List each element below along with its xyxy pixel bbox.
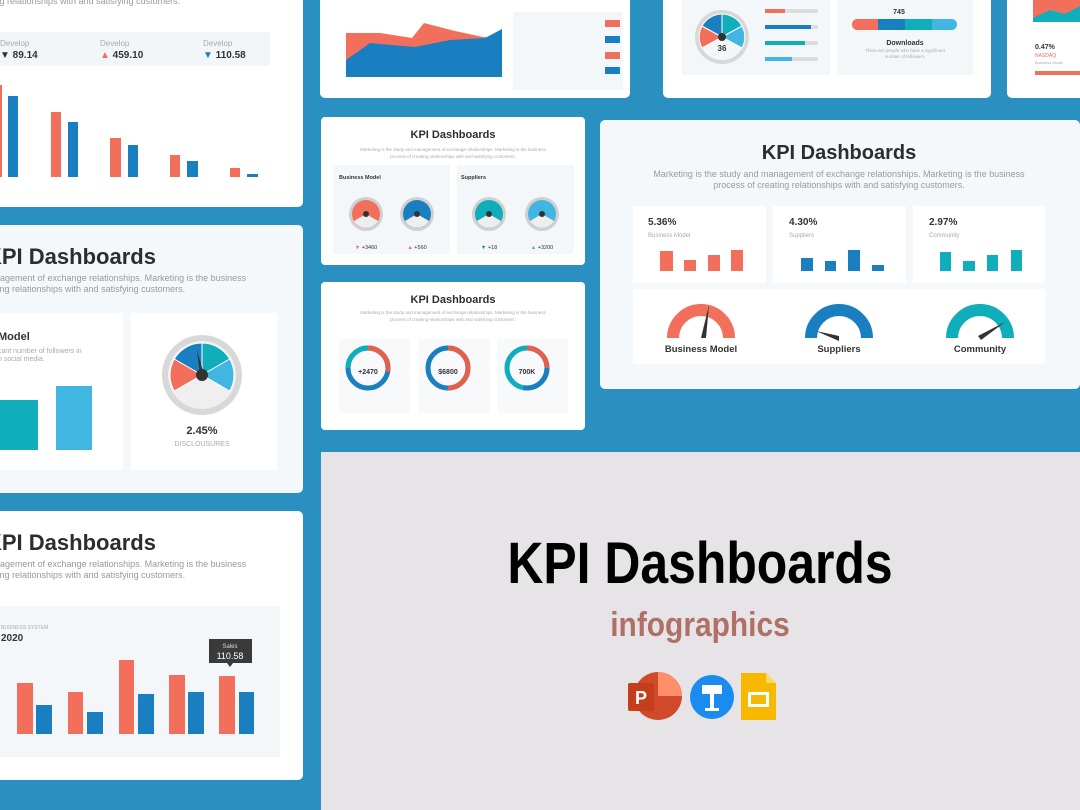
panel: main KPI slide: Community: [929, 233, 959, 239]
panel: main KPI slide: [600, 120, 1080, 389]
panel: card E gauges: Suppliers: [461, 175, 486, 181]
panel: card E gauges: [321, 117, 585, 265]
panel: card G NPS and downloads: Downloads: [886, 40, 924, 47]
panel: card G NPS and downloads: [663, 0, 991, 98]
chart: big gauge: [162, 335, 242, 415]
callout: sales tooltip: Sales: [222, 644, 238, 650]
panel: main KPI slide: 4.30%: [789, 217, 817, 228]
text block: main slide subtitle: [653, 169, 1025, 190]
panel: card A bar chart: Develop: [203, 39, 233, 48]
panel: card H: Business Model: [1035, 60, 1063, 65]
panel: card A bar chart: ▼ 110.58: [203, 50, 246, 61]
callout: sales tooltip: 110.58: [217, 651, 243, 661]
panel: card F donuts: Marketing is the study and management of exchange relationships. Marketing is the business: [360, 310, 547, 315]
panel: card E gauges: process of creating relationships with and satisfying customers.: [390, 154, 516, 159]
panel: main KPI slide: Community: [954, 344, 1007, 355]
icon: Google Slides: [741, 673, 776, 720]
panel: card E gauges: Business Model: [339, 175, 381, 181]
panel: card E gauges: ▼ +18: [481, 245, 497, 251]
panel: card C sales bar chart: BUSINESS SYSTEM: [1, 625, 48, 631]
panel: card G NPS and downloads: There are people who have a significant: [865, 48, 946, 53]
panel: card A bar chart: ▲ 459.10: [100, 50, 144, 61]
panel: card A bar chart: Develop: [0, 39, 30, 48]
text block: main slide subtitle: Marketing is the study and management of exchange relationships. Marketing is the business: [653, 169, 1025, 179]
panel: main KPI slide: Business Model: [648, 233, 690, 239]
panel: card E gauges: KPI Dashboards: [411, 129, 495, 141]
title: KPI Dashboards: [507, 532, 893, 596]
panel: card B gauge slide: DISCLOUSURES: [174, 441, 230, 448]
panel: main KPI slide: 5.36%: [648, 217, 676, 228]
icon: PowerPoint: [628, 672, 682, 720]
panel: card C sales bar chart: 2020: [1, 633, 24, 644]
panel: main KPI slide: Business Model: [665, 344, 737, 355]
icon: PowerPoint: P: [635, 688, 647, 708]
panel: card A bar chart: Develop: [100, 39, 130, 48]
panel: main KPI slide: Suppliers: [789, 233, 814, 239]
panel: gray title area: [321, 452, 1080, 810]
panel: card H: NASDAQ: [1035, 53, 1056, 59]
panel: card F donuts: +2470: [358, 369, 378, 376]
panel: card E gauges: Marketing is the study and management of exchange relationships. Marketing is the business: [360, 147, 547, 152]
panel: card G NPS and downloads: 36: [718, 44, 727, 53]
text block: main slide subtitle: process of creating relationships with and satisfying customers.: [713, 180, 965, 190]
icon: Keynote: [690, 675, 734, 719]
callout: sales tooltip: [209, 639, 252, 667]
panel: main KPI slide: Suppliers: [817, 344, 861, 355]
panel: card B gauge slide: cant number of followers in: [0, 348, 82, 355]
panel: card F donuts: [321, 282, 585, 430]
panel: card F donuts: KPI Dashboards: [411, 294, 495, 306]
panel: card A bar chart: [0, 0, 303, 207]
panel: card B gauge slide: 2.45%: [186, 425, 218, 437]
subtitle: infographics: infographics: [610, 605, 790, 643]
panel: card G NPS and downloads: 745: [893, 9, 905, 16]
panel: card F donuts: $6800: [438, 369, 458, 376]
panel: card E gauges: ▲ +560: [407, 245, 427, 251]
panel: card C sales bar chart: [0, 511, 303, 780]
panel: card E gauges: ▲ +3200: [531, 245, 553, 251]
panel: card E gauges: ▼ +3460: [355, 245, 377, 251]
heading: main slide title: KPI Dashboards: [762, 142, 916, 164]
panel: card D area chart: [320, 0, 630, 98]
panel: main KPI slide: 2.97%: [929, 217, 957, 228]
panel: card H: 0.47%: [1035, 44, 1056, 51]
panel: card A bar chart: ▼ 89.14: [0, 50, 38, 61]
panel: card F donuts: process of creating relationships with and satisfying customers.: [390, 317, 516, 322]
panel: card H: [1007, 0, 1080, 98]
panel: card F donuts: 700K: [519, 369, 535, 376]
panel: card B gauge slide: [0, 225, 303, 493]
panel: card G NPS and downloads: number of followers.: [885, 54, 925, 59]
